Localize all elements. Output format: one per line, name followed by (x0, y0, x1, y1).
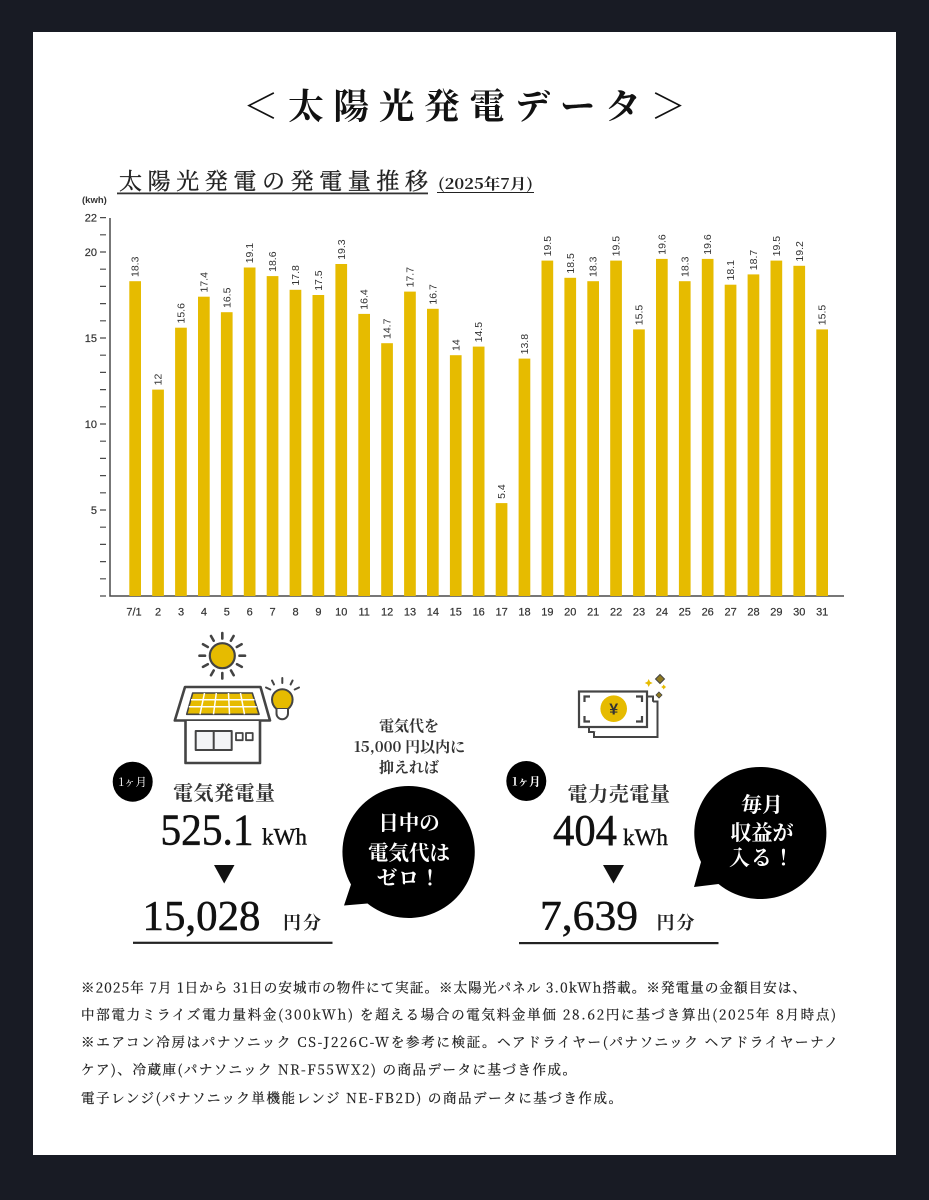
x axis date labels: 5 (224, 606, 230, 618)
x axis date labels: 3 (178, 606, 184, 618)
x axis date labels: 20 (564, 606, 576, 618)
x axis date labels: 16 (473, 606, 485, 618)
icon: sun (200, 633, 245, 678)
bar value labels: 19.3 (336, 239, 348, 260)
icon: yen bills with sparkles: ¥ (609, 702, 618, 718)
badge: one month: 1ヶ月 (118, 774, 147, 790)
bar value labels: 19.6 (702, 234, 714, 255)
x axis date labels: 28 (747, 606, 760, 618)
callout: zero daytime electricity: 電気代は (368, 836, 450, 866)
bar value labels: 14.5 (473, 322, 485, 342)
footnotes (81, 976, 838, 1107)
value: 7,639 yen: 7,639 (540, 894, 638, 940)
value: 525.1 kWh: kWh (262, 824, 307, 850)
bar value labels: 15.5 (634, 305, 646, 325)
x axis date labels: 2 (155, 606, 161, 618)
value: 404 kWh: 404 (553, 806, 617, 855)
footnotes: ※2025年 7月 1日から 31日の安城市の物件にて実証。※太陽光パネル 3.0kWh搭載。※発電量の金額目安は、 (81, 976, 806, 996)
bar value labels: 19.5 (771, 236, 783, 256)
bar value labels: 19.2 (794, 241, 806, 262)
x axis date labels: 27 (724, 606, 737, 618)
value: 15,028 yen (142, 894, 321, 940)
bar value labels: 12 (153, 374, 165, 385)
badge: one month: 1ヶ月 (512, 774, 540, 790)
label: generated power: 電気発電量 (173, 777, 275, 806)
bar value labels: 16.5 (221, 287, 233, 308)
x axis date labels: 19 (541, 606, 554, 618)
x axis date labels: 25 (679, 606, 691, 618)
x axis date labels: 31 (816, 606, 828, 618)
arrow down (603, 865, 624, 884)
x axis date labels: 26 (702, 606, 714, 618)
x axis date labels: 30 (793, 606, 805, 618)
bar value labels: 18.5 (565, 253, 577, 274)
x axis date labels: 13 (404, 606, 416, 618)
bar value labels: 19.1 (244, 243, 256, 263)
x axis date labels: 12 (381, 606, 393, 618)
icon: house with solar panels (175, 687, 270, 763)
x axis date labels: 14 (427, 606, 439, 618)
condition text: 15,000 円以内に (354, 736, 465, 757)
bar chart (82, 195, 844, 618)
callout: zero daytime electricity: ゼロ！ (377, 861, 441, 891)
bar value labels: 16.4 (359, 289, 371, 310)
callout: zero daytime electricity (342, 786, 475, 918)
bar value labels: 19.6 (656, 234, 668, 255)
y axis with ticks and labels: 5 (91, 505, 97, 517)
callout: monthly income: 入る！ (729, 842, 795, 872)
arrow down (214, 865, 234, 884)
label: sold power: 電力売電量 (568, 778, 670, 807)
bar value labels: 14.7 (382, 318, 394, 339)
bar value labels: 15.5 (817, 305, 829, 325)
x axis date labels: 15 (450, 606, 462, 618)
bar value labels: 17.5 (313, 270, 325, 291)
bar value labels: 17.4 (198, 272, 210, 292)
x axis date labels: 6 (247, 606, 253, 618)
x axis date labels: 18 (518, 606, 531, 618)
y axis with ticks and labels: 15 (85, 333, 97, 345)
bar value labels: 18.3 (679, 256, 691, 277)
x axis date labels: 22 (610, 606, 622, 618)
footnotes: ※エアコン冷房はパナソニック CS-J226C-Wを参考に検証。ヘアドライヤー(パナソニック ヘアドライヤーナノ (81, 1031, 838, 1051)
x axis date labels: 23 (633, 606, 645, 618)
x axis date labels: 17 (495, 606, 508, 618)
bar value labels: 18.1 (725, 260, 737, 280)
x axis date labels: 10 (335, 606, 347, 618)
value: 525.1 kWh (160, 806, 307, 854)
condition text: 電気代を (379, 715, 439, 736)
panel: power sold (506, 761, 826, 944)
value: 404 kWh: kWh (623, 825, 668, 850)
callout: monthly income (694, 767, 826, 899)
bar value labels: 13.8 (519, 334, 531, 354)
bar value labels: 18.7 (748, 250, 760, 270)
title: ＜太陽光発電データ＞ (243, 78, 686, 130)
value: 7,639 yen (540, 894, 694, 940)
x axis date labels: 21 (587, 606, 599, 618)
y axis with ticks and labels: 10 (85, 419, 97, 431)
condition text (354, 715, 465, 778)
value: 525.1 kWh: 525.1 (160, 806, 254, 854)
underline (519, 942, 718, 944)
icon: light bulb (266, 678, 299, 719)
footnotes: ケア)、冷蔵庫(パナソニック NR-F55WX2) の商品データに基づき作成。 (81, 1058, 576, 1078)
bar value labels: 16.7 (427, 284, 439, 305)
bar value labels: 17.7 (404, 267, 416, 287)
y axis unit label: (kwh) (82, 195, 107, 206)
x axis date labels: 29 (770, 606, 783, 618)
icon: sun over solar house with light bulb (175, 633, 299, 763)
badge: one month (113, 762, 153, 802)
callout: monthly income: 毎月 (741, 789, 783, 819)
badge: one month (506, 761, 546, 801)
callout: monthly income: 収益が (730, 817, 794, 847)
bar value labels: 15.6 (176, 303, 188, 324)
x axis date labels (126, 606, 828, 618)
bar value labels: 19.5 (542, 236, 554, 256)
bar value labels (130, 234, 829, 499)
x axis date labels: 4 (201, 606, 207, 618)
bar value labels: 17.8 (290, 265, 302, 286)
bar value labels: 19.5 (611, 236, 623, 256)
footnotes: 中部電力ミライズ電力量料金(300kWh) を超える場合の電気料金単価 28.62円に基づき算出(2025年 8月時点) (81, 1004, 836, 1024)
y axis with ticks and labels: 20 (85, 247, 97, 259)
underline (133, 942, 332, 944)
x axis date labels: 24 (656, 606, 668, 618)
icon: yen bills with sparkles (579, 674, 666, 737)
footnotes: 電子レンジ(パナソニック単機能レンジ NE-FB2D) の商品データに基づき作成。 (81, 1087, 622, 1107)
value: 404 kWh (553, 806, 668, 855)
bar value labels: 18.6 (267, 251, 279, 272)
bar value labels: 18.3 (130, 256, 142, 277)
chart heading: 太陽光発電の発電量推移 (119, 163, 428, 196)
x axis date labels: 9 (315, 606, 321, 618)
bar value labels: 18.3 (588, 256, 600, 277)
bars (129, 259, 828, 596)
value: 15,028 yen: 15,028 (142, 894, 260, 940)
bar value labels: 5.4 (496, 484, 508, 499)
y axis with ticks and labels: 22 (85, 212, 97, 224)
value: 15,028 yen: 円分 (283, 909, 321, 935)
bar value labels: 14 (450, 339, 462, 351)
y axis with ticks and labels (85, 212, 844, 597)
panel: power generation (113, 715, 475, 944)
x axis date labels: 7 (270, 606, 276, 618)
chart heading: (2025年7月) (438, 173, 533, 194)
x axis date labels: 7/1 (126, 606, 142, 618)
condition text: 抑えれば (379, 756, 439, 778)
x axis date labels: 8 (292, 606, 299, 618)
callout: zero daytime electricity: 日中の (378, 806, 440, 836)
x axis date labels: 11 (358, 606, 370, 618)
value: 7,639 yen: 円分 (656, 909, 694, 935)
